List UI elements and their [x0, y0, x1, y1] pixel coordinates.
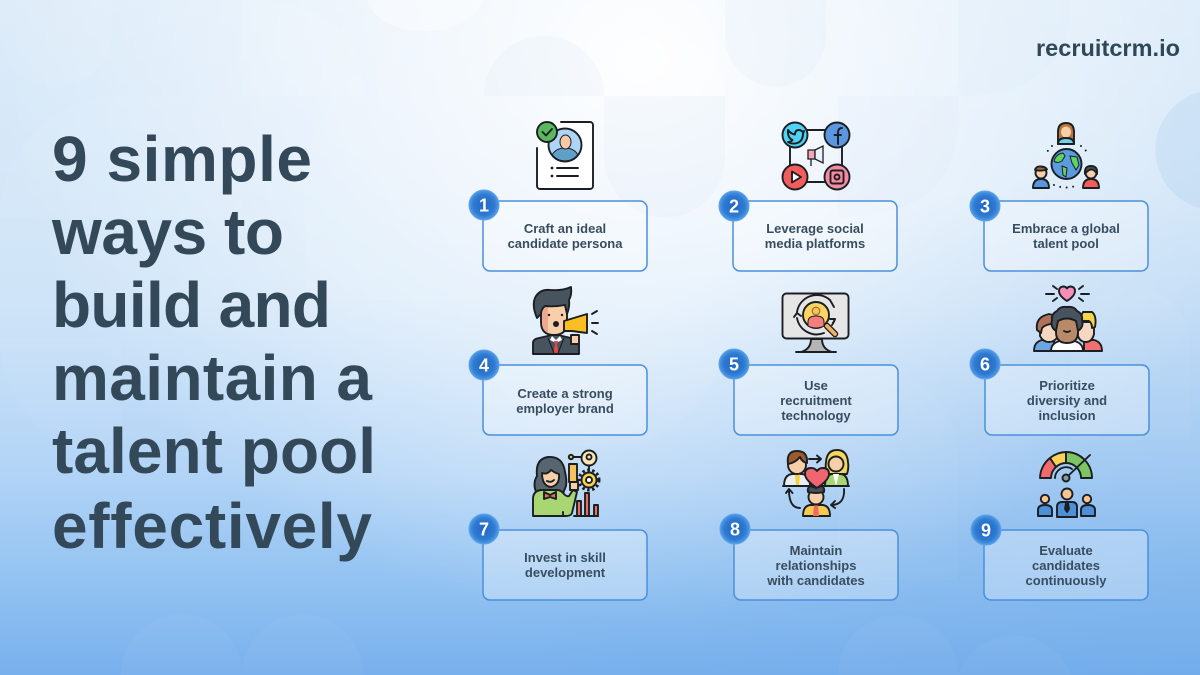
- card 5: [719, 349, 898, 435]
- card 4: [469, 350, 647, 435]
- card 1: [469, 190, 647, 271]
- icon: man with megaphone: [533, 287, 598, 354]
- card 3: 3: [980, 196, 990, 216]
- card 1: 1: [479, 196, 489, 216]
- card 6: 6: [980, 354, 990, 374]
- icon: relationships with candidates: [783, 450, 849, 516]
- title: maintain a: [52, 342, 372, 414]
- card 7: development: [525, 565, 606, 580]
- card 4: 4: [479, 356, 489, 376]
- card 3: Embrace a global: [1012, 221, 1120, 236]
- title: ways to: [51, 196, 284, 268]
- logo: recruitcrm.io: [1036, 35, 1180, 61]
- title: build and: [52, 269, 331, 341]
- icon: diverse team with heart: [1034, 286, 1102, 351]
- title: 9 simple: [52, 123, 312, 195]
- card 6: diversity and: [1027, 393, 1107, 408]
- card 4: Create a strong: [517, 386, 613, 401]
- card 6: inclusion: [1038, 408, 1096, 423]
- card 2: Leverage social: [766, 221, 864, 236]
- card 1: Craft an ideal: [524, 221, 606, 236]
- card 5: Use: [804, 378, 828, 393]
- title: talent pool: [52, 415, 376, 487]
- card 5: 5: [729, 354, 739, 374]
- icon: evaluation gauge with people: [1038, 452, 1095, 517]
- card 6: Prioritize: [1039, 378, 1095, 393]
- title: effectively: [52, 490, 372, 562]
- card 3: talent pool: [1033, 236, 1099, 251]
- card 9: Evaluate: [1039, 543, 1093, 558]
- title: [51, 123, 376, 562]
- card 3: [970, 191, 1148, 271]
- icon: recruitment technology monitor: [782, 294, 848, 352]
- card 9: 9: [981, 520, 991, 540]
- icon: social media platforms: [782, 122, 850, 190]
- card 5: recruitment: [780, 393, 852, 408]
- card 7: [469, 514, 647, 600]
- card 2: [719, 191, 897, 271]
- card 5: technology: [781, 408, 851, 423]
- card 7: Invest in skill: [524, 550, 606, 565]
- card 8: Maintain: [790, 543, 842, 558]
- card 1: candidate persona: [508, 236, 623, 251]
- card 2: media platforms: [765, 236, 865, 251]
- icon: candidate profile document: [537, 122, 593, 189]
- card 4: employer brand: [516, 401, 614, 416]
- icon: global talent: [1033, 123, 1099, 188]
- card 6: [970, 349, 1149, 435]
- card 7: 7: [479, 520, 489, 540]
- card 8: relationships: [776, 558, 856, 573]
- card 8: [720, 514, 898, 600]
- card 2: 2: [729, 196, 739, 216]
- card 8: with candidates: [766, 573, 865, 588]
- icon: woman with skill development chart: [533, 450, 599, 516]
- card 9: candidates: [1032, 558, 1100, 573]
- card 9: continuously: [1026, 573, 1107, 588]
- card 8: 8: [730, 520, 740, 540]
- card 9: [971, 515, 1148, 600]
